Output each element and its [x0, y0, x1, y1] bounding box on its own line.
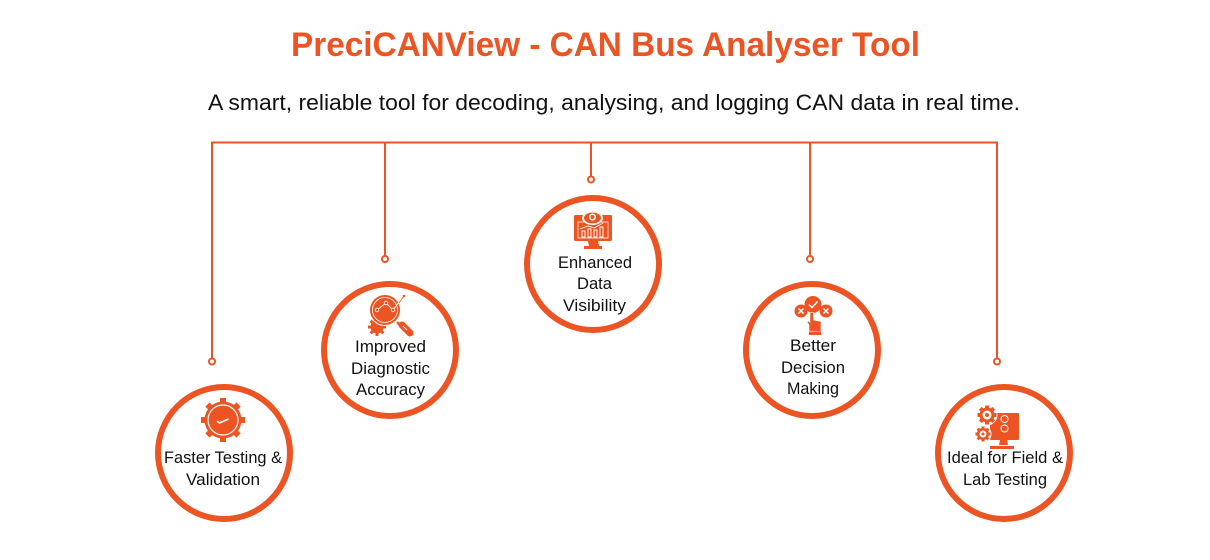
panel: ideal for field and lab testing	[938, 387, 1070, 519]
label: improved: Improved	[355, 338, 426, 356]
connector tree	[209, 142, 1000, 364]
label: validation: Validation	[186, 471, 260, 489]
label: visibility: Visibility	[563, 297, 627, 315]
label: enhanced: Enhanced	[558, 254, 632, 272]
label: lab testing: Lab Testing	[963, 471, 1047, 489]
icon: gear with check	[201, 398, 245, 442]
title: PreciCANView - CAN Bus Analyser Tool	[291, 26, 920, 64]
label: making: Making	[787, 380, 839, 398]
icon: monitor with eye and chart	[574, 211, 612, 249]
label: faster testing: Faster Testing &	[164, 449, 282, 467]
label: diagnostic: Diagnostic	[351, 360, 430, 378]
panel: faster testing and validation	[158, 387, 290, 519]
panel: better decision making	[746, 284, 878, 416]
label: data: Data	[577, 275, 613, 293]
panel: improved diagnostic accuracy	[324, 284, 456, 416]
label: accuracy: Accuracy	[356, 381, 426, 399]
icon: gears and monitor	[974, 404, 1019, 449]
icon: magnifier with chart	[368, 294, 410, 336]
subtitle: A smart, reliable tool for decoding, analysing, and logging CAN data in real time.	[208, 90, 1020, 115]
icon: hand selecting check	[794, 296, 832, 335]
label: decision: Decision	[781, 359, 845, 377]
panel: enhanced data visibility	[527, 198, 659, 330]
label: ideal for field: Ideal for Field &	[947, 449, 1063, 467]
label: better: Better	[790, 337, 837, 355]
